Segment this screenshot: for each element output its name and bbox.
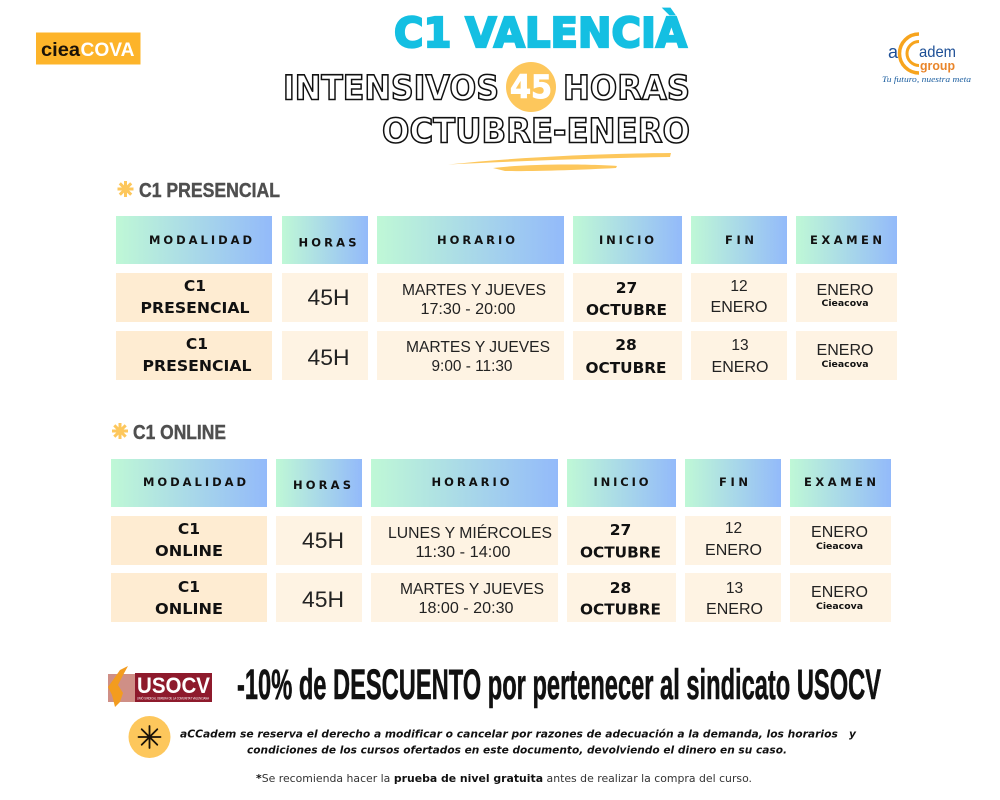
row 1: 17:30 - 20:00 [420, 301, 516, 318]
row 1: OCTUBRE [586, 301, 667, 319]
header row: INICIO [594, 475, 649, 489]
logo: USOCV: UNIÓ SINDICAL OBRERA DE LA COMUNITAT VALENCIANA [137, 696, 209, 700]
row 1: ENERO [811, 524, 868, 541]
row 2 [111, 573, 891, 622]
row 2: Cieacova [822, 360, 868, 370]
subtitle: octubre-enero: OCTUBRE-ENERO [382, 111, 690, 151]
row 2: 45H [302, 587, 344, 612]
header row [111, 459, 891, 507]
logo: USOCV: USOCV [137, 673, 210, 698]
header row: FIN [725, 233, 754, 247]
row 2 [116, 331, 897, 380]
row 1: Cieacova [816, 542, 863, 552]
disclaimer note: condiciones de los cursos ofertados en este documento, devolviendo el dinero en su caso. [247, 744, 787, 756]
header row: EXAMEN [804, 475, 876, 489]
row 1: 27 [616, 279, 637, 297]
row 2: PRESENCIAL [142, 357, 252, 375]
row 2: 18:00 - 20:30 [418, 600, 514, 617]
subtitle: intensivos 45 horas: HORAS [563, 68, 690, 108]
footnote: *Se recomienda hacer la prueba de nivel gratuita antes de realizar la compra del curso. [256, 772, 752, 785]
row 1: 12 [725, 520, 742, 537]
row 1: 12 [730, 278, 748, 295]
logo: USOCV [108, 666, 212, 707]
icon: orange asterisk [118, 181, 134, 197]
row 2: ENERO [706, 601, 763, 618]
row 2: ENERO [712, 359, 768, 376]
logo: aCCadem group [882, 34, 971, 84]
header row: INICIO [599, 233, 654, 247]
heading: C1 presencial: C1 PRESENCIAL [139, 180, 280, 202]
row 1: Cieacova [822, 299, 868, 309]
row 1: ENERO [710, 299, 768, 316]
title: C1 VALENCIÀ [394, 9, 687, 57]
logo: cieaCOVA [36, 32, 140, 64]
row 2: Cieacova [816, 602, 863, 612]
logo: aCCadem group: adem [919, 44, 956, 61]
row 2: ENERO [816, 342, 874, 359]
badge: 45: 45 [510, 68, 552, 106]
row 1: ENERO [705, 542, 762, 559]
row 1: ENERO [816, 282, 874, 299]
logo: aCCadem group: a [888, 42, 899, 62]
header row: HORAS [293, 478, 351, 492]
header row: FIN [719, 475, 748, 489]
header row: HORARIO [437, 233, 515, 247]
disclaimer note [180, 728, 857, 756]
subtitle: intensivos 45 horas: INTENSIVOS [283, 68, 499, 108]
row 2: ENERO [811, 584, 868, 601]
row 2: 13 [731, 337, 749, 354]
row 1: MARTES Y JUEVES [402, 282, 546, 299]
row 1: ONLINE [155, 542, 223, 560]
row 2: MARTES Y JUEVES [400, 581, 544, 598]
icon: orange asterisk [112, 423, 128, 439]
row 2: 9:00 - 11:30 [432, 358, 513, 375]
decorative underline squiggle [448, 153, 671, 171]
row 2: 13 [726, 580, 743, 597]
row 1: 45H [302, 528, 344, 553]
row 2: ONLINE [155, 600, 223, 618]
row 1: 27 [610, 521, 631, 539]
row 1: 11:30 - 14:00 [416, 544, 511, 561]
table: C1 online [111, 459, 891, 622]
logo: cieaCOVA: COVA [80, 40, 135, 61]
row 1: OCTUBRE [580, 544, 661, 562]
row 1 [116, 273, 897, 322]
header row: HORAS [298, 236, 356, 250]
row 2: MARTES Y JUEVES [406, 339, 550, 356]
row 2: C1 [186, 335, 208, 353]
header row: MODALIDAD [149, 233, 252, 247]
disclaimer note: aCCadem se reserva el derecho a modificar o cancelar por razones de adecuación a la demanda, los horarios y [180, 728, 857, 740]
row 1: LUNES Y MIÉRCOLES [388, 525, 552, 542]
header row [116, 216, 897, 264]
heading: C1 online: C1 ONLINE [133, 422, 226, 444]
row 1 [111, 516, 891, 565]
row 2: 28 [610, 579, 631, 597]
header row: HORARIO [432, 475, 510, 489]
row 2: 28 [615, 336, 637, 354]
row 1: 45H [308, 285, 350, 310]
header row: MODALIDAD [143, 475, 246, 489]
subtitle: intensivos 45 horas [283, 62, 690, 112]
table: C1 presencial [116, 216, 897, 380]
row 1: C1 [184, 277, 206, 295]
row 1: C1 [178, 520, 200, 538]
row 1: PRESENCIAL [140, 299, 250, 317]
logo: aCCadem group: Tu futuro, nuestra meta [882, 74, 971, 84]
row 2: OCTUBRE [580, 600, 661, 618]
icon: asterisk badge [128, 716, 170, 758]
logo: aCCadem group: group [920, 58, 955, 73]
logo: cieaCOVA: ciea [41, 40, 80, 61]
badge: 45 [506, 62, 556, 112]
header row: EXAMEN [810, 233, 882, 247]
row 2: OCTUBRE [586, 359, 666, 377]
row 2: C1 [178, 578, 200, 596]
row 2: 45H [308, 345, 350, 370]
